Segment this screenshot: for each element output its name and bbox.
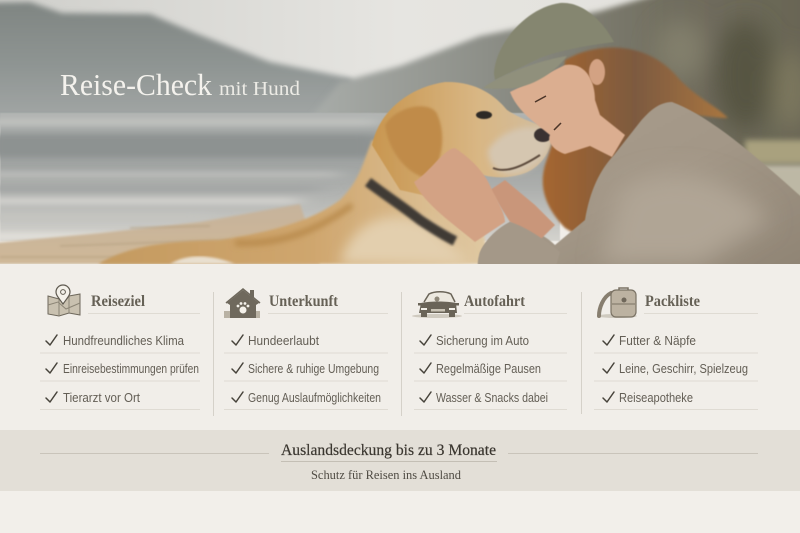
icon: car with dog [412, 292, 462, 318]
checklist items [40, 334, 200, 410]
panel: Unterkunft [224, 289, 388, 410]
cap brim [483, 56, 567, 89]
checklist items: Genug Auslaufmöglichkeiten [248, 391, 381, 405]
band heading: Auslandsdeckung bis zu 3 Monate [281, 442, 496, 459]
white belly fur [170, 256, 235, 264]
heading: Reiseziel [91, 293, 146, 310]
woman [414, 3, 800, 270]
icon: backpack [597, 288, 637, 318]
left mountains [0, 0, 353, 118]
checklist items [594, 334, 758, 410]
checklist items: Sicherung im Auto [436, 334, 529, 348]
dog collar [368, 182, 455, 241]
face and neck [510, 65, 625, 157]
dog chest highlight [340, 217, 470, 264]
dog muzzle [488, 127, 550, 174]
hair [543, 47, 728, 240]
title: Reise-Check [60, 67, 212, 102]
heading: Packliste [645, 293, 700, 310]
sweater highlight [600, 174, 770, 264]
dog head [372, 82, 552, 200]
title [60, 67, 300, 102]
title: mit Hund [219, 78, 300, 100]
lake reflections [0, 118, 380, 240]
bottom band: Auslandsdeckung [0, 430, 800, 491]
checklist items: Leine, Geschirr, Spielzeug [619, 362, 748, 376]
dog nose [534, 128, 552, 142]
dog ear [385, 106, 442, 178]
dog eye [476, 111, 492, 119]
icon: map with pin [48, 285, 80, 316]
checklist items: Futter & Näpfe [619, 334, 696, 348]
checklist panel [0, 264, 800, 430]
dog fur shading [235, 205, 352, 243]
bottom margin [0, 491, 800, 533]
right mountains [305, 0, 800, 170]
heading: Autofahrt [464, 293, 526, 310]
band subtitle: Schutz für Reisen ins Ausland [311, 467, 461, 482]
wooden dock [0, 204, 320, 264]
forest shading at right [655, 20, 800, 130]
arm [490, 180, 555, 240]
sky [0, 0, 634, 78]
panel: Packliste [594, 288, 758, 410]
lake [0, 113, 560, 241]
heading: Unterkunft [269, 293, 339, 310]
checklist items [414, 334, 567, 410]
hero photo: woman and dog at the lake [0, 0, 800, 270]
far shore at right [745, 140, 800, 164]
cap crown [494, 3, 614, 80]
ear [589, 59, 605, 85]
dog body and tail [98, 140, 490, 264]
checklist items [224, 334, 388, 410]
icon: house with paw [224, 289, 260, 318]
checklist items: Einreisebestimmungen prüfen [63, 362, 199, 376]
sweater cuff [480, 222, 542, 252]
checklist items: Hundfreundliches Klima [63, 334, 184, 348]
closed eye and smile [535, 96, 561, 130]
sweater [478, 102, 800, 270]
panel: Autofahrt [412, 292, 567, 410]
checklist items: Hundeerlaubt [248, 334, 319, 348]
panel: Reiseziel [40, 285, 200, 410]
dog mouth [493, 155, 540, 170]
hand on dog [414, 148, 505, 242]
checklist items: Reiseapotheke [619, 391, 693, 405]
dog [98, 82, 552, 264]
checklist items: Wasser & Snacks dabei [436, 391, 548, 405]
checklist items: Sichere & ruhige Umgebung [248, 362, 379, 376]
checklist items: Tierarzt vor Ort [63, 391, 140, 405]
checklist items: Regelmäßige Pausen [436, 362, 541, 376]
